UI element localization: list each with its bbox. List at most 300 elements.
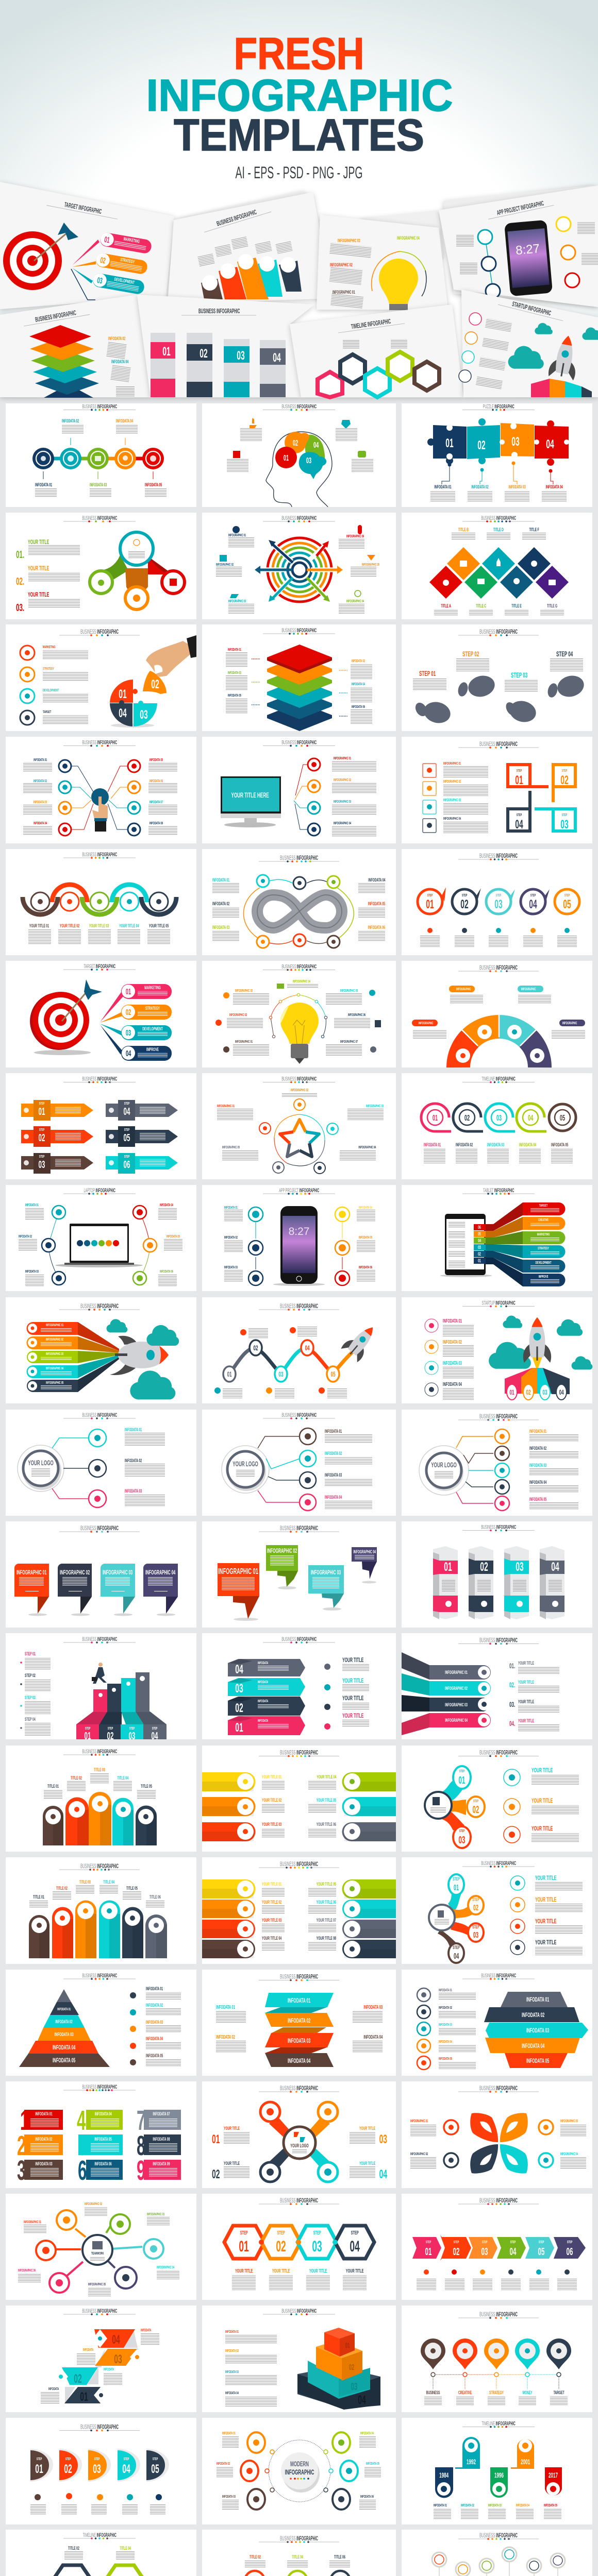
- slide card: columns: BUSINESS INFOGRAPHIC: [198, 308, 240, 315]
- text blocks: INFOGRAPHIC 05: [362, 563, 380, 567]
- stack: [484, 1992, 588, 2068]
- text blocks: INFOGRAPHIC 06: [346, 535, 364, 538]
- boxes: INFODATA 09: [153, 2161, 170, 2166]
- panel: metaball four steps: 03: [473, 1930, 478, 1940]
- heading: BUSINESS INFOGRAPHIC: [80, 1863, 119, 1870]
- heading: BUSINESS INFOGRAPHIC: [281, 515, 317, 521]
- boxes: 6: [78, 2155, 87, 2186]
- heading: [263, 627, 335, 634]
- slide card: columns: 03: [237, 349, 245, 363]
- heading: PUZZLE INFOGRAPHIC: [483, 403, 514, 410]
- panel: eight horizontal bands: [202, 1857, 396, 1964]
- panel: puzzle circle with hand: [6, 624, 196, 731]
- text blocks: INFODATA 04: [516, 2504, 529, 2507]
- puzzle circle: 04: [119, 706, 127, 720]
- heading: BUSINESS INFOGRAPHIC: [80, 2424, 119, 2431]
- text blocks: INFOGRAPHIC 06: [348, 1013, 366, 1017]
- text blocks: [217, 1089, 384, 1161]
- pills: IMPROVE: [146, 1046, 159, 1052]
- text blocks: YOUR TITLE: [224, 2125, 240, 2131]
- panel: metaball four steps: [402, 1857, 592, 1964]
- heading: [462, 1075, 535, 1082]
- hub: MODERN: [290, 2461, 309, 2468]
- subtitle: file formats: AI - EPS - PSD - PNG - JPG: [235, 163, 363, 182]
- text blocks: 04.: [509, 1720, 515, 1728]
- panel: teamwork hub: TEAMWORK: [91, 2252, 104, 2256]
- text blocks: [214, 1326, 347, 1398]
- heading: BUSINESS INFOGRAPHIC: [82, 1748, 118, 1755]
- text blocks: YOUR TITLE: [28, 539, 49, 546]
- heading: BUSINESS INFOGRAPHIC: [82, 2083, 118, 2090]
- panel: metaball four steps: STEP: [453, 1944, 460, 1950]
- text blocks: INFODATA 01: [529, 1428, 546, 1434]
- hub: INFOGRAPHIC: [285, 2469, 314, 2477]
- nodes: [223, 1340, 339, 1382]
- panel: stacked layers: [202, 624, 396, 731]
- heading: [462, 403, 535, 410]
- heading: BUSINESS INFOGRAPHIC: [80, 1525, 119, 1532]
- ribbons: CREATIVE: [538, 1218, 549, 1222]
- heading: LAPTOP INFOGRAPHIC: [84, 1187, 115, 1194]
- panel: metaball four steps: STEP: [453, 1876, 460, 1882]
- chevrons: STEP: [426, 2241, 431, 2244]
- text blocks: YOUR TITLE 07: [317, 1917, 336, 1923]
- heading: BUSINESS INFOGRAPHIC: [281, 2308, 317, 2314]
- text blocks: INFODATA 05: [368, 901, 385, 906]
- blocks: 04: [358, 2393, 366, 2407]
- base columns: 01: [510, 1389, 514, 1397]
- panel: logo with four branches: [202, 1410, 396, 1516]
- parallelograms: 01: [80, 2390, 88, 2404]
- text blocks: TITLE 04: [120, 2545, 131, 2551]
- icons and text: YOUR TITLE: [342, 1695, 364, 1702]
- panel: step squares: 04: [515, 818, 523, 832]
- labels: INFOGRAPHIC: [456, 988, 471, 991]
- heading: BUSINESS INFOGRAPHIC: [481, 515, 517, 521]
- text blocks: INFODATA 03: [222, 2495, 236, 2499]
- panel: concentric target arrows: [202, 513, 396, 619]
- connectors: [256, 1222, 342, 1269]
- text blocks: YOUR TITLE: [518, 1679, 534, 1685]
- timeline: [433, 2375, 559, 2389]
- panel: spiral rings: 02: [464, 1113, 470, 1123]
- text blocks: [212, 2125, 387, 2181]
- logo circle: [222, 1446, 269, 1493]
- text blocks: [226, 648, 372, 724]
- center button and hand: [91, 788, 109, 832]
- rocket: [340, 1320, 381, 1363]
- panel: step squares: STEP: [517, 814, 522, 817]
- puzzle circle: 01: [119, 687, 127, 701]
- hand: [146, 635, 196, 677]
- text blocks: INFODATA 04: [34, 822, 47, 825]
- text blocks: INFOGRAPHIC 01: [235, 1040, 253, 1044]
- hexagons: [28, 2565, 171, 2576]
- circles: [237, 1773, 360, 1840]
- heading: [458, 2197, 539, 2205]
- arrows: INFODATA: [258, 1662, 268, 1665]
- text blocks: INFODATA 02: [62, 418, 79, 423]
- tags: STEP: [39, 1102, 44, 1106]
- text blocks: INFOGRAPHIC 05: [222, 1146, 240, 1149]
- panel: metaball four steps: 02: [473, 1903, 478, 1912]
- heading: [63, 1412, 136, 1418]
- heading: BUSINESS INFOGRAPHIC: [280, 855, 318, 862]
- panel: logo with three branches: YOUR LOGO: [28, 1460, 54, 1467]
- heading: [59, 1525, 140, 1532]
- list: [510, 1876, 525, 1955]
- text blocks: 01.: [509, 1663, 515, 1670]
- heading: [462, 1972, 535, 1979]
- heading: [462, 1187, 535, 1194]
- boxes: 5: [78, 2130, 87, 2161]
- heading: BUSINESS INFOGRAPHIC: [280, 2535, 318, 2543]
- panel: wave with rocket: 04: [305, 1345, 310, 1352]
- stack: INFODATA 03: [526, 2027, 550, 2035]
- boxes: INFODATA 02: [35, 2136, 53, 2142]
- heading: [63, 515, 136, 521]
- panel: speech ribbons row: [6, 1521, 196, 1628]
- text blocks: INFOGRAPHIC 03: [560, 2120, 578, 2123]
- slide card: layers: INFODATA 04: [111, 359, 129, 364]
- panel: zigzag parallelograms: [6, 2306, 196, 2412]
- text blocks: INFODATA 06: [359, 1266, 372, 1269]
- panel: spiral rings: 03: [496, 1113, 502, 1123]
- text blocks: TITLE F: [529, 527, 539, 532]
- chevrons: 02: [453, 2246, 459, 2258]
- text blocks: INFOGRAPHIC 02: [291, 1089, 308, 1092]
- panel: spiral rings: 04: [528, 1113, 534, 1123]
- heading: [462, 1299, 535, 1307]
- text blocks: INFOGRAPHIC 02: [229, 1013, 247, 1017]
- text blocks: [232, 2268, 367, 2290]
- text blocks: INFODATA 01: [34, 758, 47, 762]
- text blocks: YOUR TITLE 01: [29, 923, 49, 928]
- pyramid: INFODATA 03: [55, 2031, 74, 2037]
- chevrons: 05: [538, 2246, 544, 2258]
- panel: hexagon steps: STEP: [277, 2230, 285, 2235]
- text blocks: INFODATA 05: [359, 1236, 372, 1240]
- pyramid: INFODATA 02: [55, 2019, 73, 2024]
- capsules: 02: [64, 2462, 72, 2476]
- nodes: [495, 1429, 509, 1511]
- panel: step rings: STEP: [496, 894, 501, 897]
- capsules: [30, 2449, 169, 2482]
- nodes: [444, 2120, 553, 2167]
- clouds: [489, 1316, 592, 1369]
- text blocks: INFODATA 02: [216, 2034, 235, 2040]
- year blocks: 1996: [494, 2472, 504, 2480]
- panel: step rings: STEP: [564, 894, 570, 897]
- columns: 03: [516, 1560, 524, 1574]
- footprints: [413, 673, 586, 726]
- ribbons: INFOGRAPHIC 03: [103, 1569, 133, 1577]
- ring: [274, 1114, 325, 1166]
- heading: [458, 964, 539, 972]
- panel: puzzle: [402, 403, 592, 507]
- panel: petals: [402, 2081, 592, 2188]
- ribbons: INFOGRAPHIC 01: [218, 1566, 258, 1576]
- pills: 04: [126, 1048, 131, 1058]
- text blocks: YOUR TITLE 01: [262, 1881, 281, 1887]
- text blocks: INFOGRAPHIC 01: [24, 2221, 42, 2224]
- arcs: [23, 885, 176, 914]
- panel: metaball three steps: 03: [459, 1835, 465, 1846]
- text blocks: INFODATA 02: [225, 2349, 239, 2353]
- heading: [63, 1187, 136, 1194]
- list: STEP 03: [25, 1694, 36, 1700]
- heading: BUSINESS INFOGRAPHIC: [479, 1637, 518, 1644]
- columns: 02: [480, 1560, 488, 1574]
- tags: 04: [124, 1106, 130, 1117]
- tags: STEP: [39, 1155, 44, 1159]
- ribbons: 01: [478, 1258, 481, 1263]
- text blocks: TITLE 03: [94, 1767, 105, 1772]
- panel: metaball three steps: 02: [473, 1804, 479, 1816]
- capsules: 05: [151, 2462, 159, 2476]
- text blocks: INFODATA 03: [90, 482, 107, 487]
- slide card: target: [0, 182, 174, 309]
- text blocks: INFODATA 01: [222, 2432, 236, 2435]
- heading: TIMELINE INFOGRAPHIC: [482, 2420, 516, 2427]
- text blocks and icons: [227, 418, 373, 472]
- heading: [259, 2085, 339, 2092]
- text blocks: INFODATA 04: [519, 1142, 537, 1147]
- capsules: STEP: [124, 2458, 129, 2461]
- heading: BUSINESS INFOGRAPHIC: [280, 2085, 318, 2092]
- heading: BUSINESS INFOGRAPHIC: [82, 1636, 118, 1642]
- text blocks: INFODATA: [141, 2329, 151, 2332]
- base columns: 03: [542, 1389, 547, 1397]
- parallelograms: [54, 2329, 144, 2404]
- panel: metaball three steps: YOUR TITLE: [531, 1798, 553, 1805]
- text blocks: INFODATA 01: [325, 1428, 342, 1434]
- text blocks: INFOGRAPHIC 01: [217, 1105, 235, 1108]
- year blocks: 2001: [521, 2459, 530, 2466]
- panel: chain of seven: [202, 2530, 396, 2576]
- title: TEMPLATES: TEMPLATES: [174, 110, 424, 160]
- ribbons: [218, 1545, 377, 1621]
- slide card: light bulb: INFOGRAPHIC 04: [397, 235, 420, 241]
- text blocks: INFODATA 01: [225, 2330, 239, 2334]
- panel: half ring: [402, 961, 592, 1067]
- ribbons: INFOGRAPHIC 04: [145, 1569, 176, 1577]
- heading: BUSINESS INFOGRAPHIC: [281, 739, 317, 745]
- ribbons: 04: [478, 1238, 481, 1243]
- stairs: [76, 1672, 167, 1742]
- panel: metaball three steps: STEP: [459, 1829, 464, 1833]
- slide card: columns: 04: [273, 351, 281, 365]
- text blocks: YOUR TITLE 03: [262, 1821, 281, 1827]
- heading: BUSINESS INFOGRAPHIC: [280, 1973, 318, 1980]
- arrows: 03: [235, 1682, 243, 1696]
- stairs: 02: [107, 1731, 113, 1742]
- heading: [462, 515, 535, 521]
- text blocks: YOUR TITLE: [235, 2268, 253, 2274]
- text blocks: YOUR TITLE 03: [89, 923, 109, 928]
- panel: step arrow tags: [6, 1073, 196, 1179]
- panel: cross with logo: YOUR LOGO: [290, 2143, 309, 2148]
- text blocks: INFODATA 02: [34, 779, 47, 783]
- heading: BUSINESS INFOGRAPHIC: [82, 1075, 118, 1082]
- list: [130, 1986, 181, 2066]
- panel: pins timeline: [402, 2306, 592, 2412]
- ribbons: DEVELOPMENT: [536, 1261, 552, 1265]
- text blocks: [224, 2554, 371, 2576]
- panel: step squares: STEP: [562, 814, 567, 817]
- text blocks: INFODATA: [48, 2387, 59, 2391]
- heading: BUSINESS INFOGRAPHIC: [281, 1636, 317, 1642]
- text blocks: INFODATA 05: [551, 1142, 568, 1147]
- heading: BUSINESS INFOGRAPHIC: [479, 1749, 518, 1756]
- pills: STRATEGY: [145, 1005, 160, 1011]
- heading: [259, 1973, 339, 1980]
- heading: TIMELINE INFOGRAPHIC: [482, 1075, 516, 1082]
- text blocks: [212, 877, 386, 941]
- connectors: [440, 1781, 466, 1831]
- slide card: app phone: [439, 185, 598, 307]
- icons and text: [30, 2493, 165, 2515]
- layers: [267, 645, 332, 731]
- text blocks: [43, 646, 88, 725]
- list: [504, 1769, 520, 1843]
- heading: [59, 1303, 140, 1310]
- text blocks: TITLE 06: [334, 2554, 345, 2560]
- text blocks: INFODATA 01: [25, 1204, 39, 1207]
- panel: diamonds: [402, 513, 592, 619]
- panel: five arched bars: [6, 1745, 196, 1852]
- list: STEP 04: [25, 1716, 36, 1722]
- heading: STARTUP INFOGRAPHIC: [482, 1299, 516, 1306]
- panel: hexagon steps: STEP: [351, 2230, 359, 2235]
- text blocks: TITLE A: [441, 603, 451, 608]
- bars: [29, 1900, 167, 1958]
- nodes: [300, 1428, 316, 1511]
- heading: BUSINESS INFOGRAPHIC: [479, 853, 518, 860]
- slide card: target: 03: [96, 275, 103, 285]
- panel: startup rocket: [402, 1297, 592, 1403]
- text blocks: BUSINESS: [426, 2389, 440, 2395]
- text blocks: TITLE 02: [71, 1775, 82, 1781]
- panel: teamwork hub: [6, 2194, 196, 2300]
- half ring segments: [458, 1027, 540, 1067]
- slide card: light bulb: INFOGRAPHIC 02: [330, 262, 353, 267]
- bands left: [202, 1879, 256, 1958]
- columns: 01: [444, 1560, 452, 1574]
- panel: step rings: 02: [460, 897, 469, 911]
- puzzle pieces: 03: [511, 435, 520, 449]
- panel: startup rocket: INFODATA 03: [443, 1360, 462, 1366]
- panel: logo with three branches: [6, 1410, 196, 1516]
- text blocks: [424, 2389, 568, 2406]
- ribbons: [26, 1322, 78, 1392]
- text blocks: YOUR TITLE 06: [317, 1821, 336, 1827]
- chevrons: STEP: [567, 2241, 572, 2244]
- text blocks: INFOGRAPHIC 01: [228, 534, 246, 537]
- arrows: INFODATA: [258, 1719, 268, 1723]
- text blocks: [224, 1206, 375, 1282]
- panel: startup rocket: INFODATA 01: [443, 1318, 462, 1324]
- text blocks: INFOGRAPHIC 04: [560, 2153, 578, 2156]
- text blocks: [262, 1881, 336, 1951]
- arrows: [228, 1659, 305, 1735]
- boxes: INFODATA 04: [95, 2111, 112, 2116]
- stairs: 01: [85, 1731, 91, 1742]
- panel: metaball three steps: STEP: [473, 1800, 478, 1803]
- heading: [63, 2532, 136, 2538]
- shadows: [28, 1614, 175, 1616]
- capsules: STEP: [94, 2458, 99, 2461]
- slide card: target: MARKETING: [123, 236, 140, 244]
- stack: INFODATA 05: [526, 2058, 550, 2065]
- boxes: 1: [20, 2105, 29, 2136]
- monitor: [221, 776, 281, 827]
- puzzle circle: 02: [151, 677, 159, 691]
- branches: [52, 1438, 88, 1499]
- panel: speech ribbons staggered: [202, 1521, 396, 1628]
- panel: phone app: [202, 1185, 396, 1291]
- ribbons: INFODATA 02: [288, 2018, 311, 2025]
- text blocks: CREATIVE: [458, 2389, 472, 2395]
- text blocks: INFOGRAPHIC 06: [18, 2269, 36, 2273]
- boxes: 9: [137, 2155, 145, 2186]
- parallelograms: 03: [114, 2352, 122, 2366]
- heading: BUSINESS INFOGRAPHIC: [479, 964, 518, 972]
- panel: step squares: 03: [560, 818, 569, 832]
- ribbons: [14, 1564, 178, 1614]
- text blocks: INFODATA 02: [529, 1445, 546, 1451]
- head outline: [266, 432, 332, 507]
- panel: metaball four steps: YOUR TITLE: [535, 1939, 557, 1946]
- text blocks: INFOGRAPHIC 03: [147, 2213, 164, 2216]
- ribbons: INFOGRAPHIC 04: [445, 1717, 468, 1723]
- panel: spiral rings: [402, 1073, 592, 1179]
- heading: [462, 1523, 535, 1530]
- heading: TABLET INFOGRAPHIC: [483, 1187, 514, 1194]
- text blocks: YOUR TITLE 04: [262, 1935, 282, 1941]
- text blocks: TITLE 02: [68, 2545, 79, 2551]
- text blocks: INFODATA 01: [212, 877, 229, 883]
- text blocks: INFOGRAPHIC 03: [228, 600, 246, 603]
- stack: INFODATA 02: [522, 2012, 545, 2019]
- text blocks: INFODATA 04: [352, 683, 365, 686]
- panel: spiral rings: 01: [433, 1113, 438, 1123]
- nodes: [259, 1099, 338, 1174]
- heading: TARGET INFOGRAPHIC: [84, 963, 116, 970]
- connectors: [252, 659, 347, 716]
- boxes: [17, 2105, 181, 2186]
- nodes: [89, 1429, 106, 1507]
- hub: [269, 2440, 330, 2502]
- text blocks: MARKETING: [43, 646, 56, 649]
- list: [417, 1988, 430, 2070]
- text blocks: YOUR TITLE: [224, 2160, 240, 2166]
- text blocks: [125, 1427, 165, 1507]
- text blocks: INFODATA 03: [25, 1270, 39, 1274]
- list: STEP 02: [25, 1672, 36, 1678]
- panel: hexagon grid: [6, 2530, 196, 2576]
- text blocks: INFODATA 03: [212, 924, 229, 930]
- panel: step squares: 02: [560, 773, 569, 787]
- panel: hexagon stack: INFODATA 05: [439, 2057, 452, 2061]
- blocks: [297, 2328, 380, 2410]
- text blocks: YOUR TITLE: [359, 2125, 375, 2131]
- text blocks: INFOGRAPHIC 02: [334, 778, 351, 782]
- tags: 05: [124, 1132, 130, 1144]
- panel: step rings: 03: [494, 897, 503, 911]
- panel: hexagon steps: 02: [276, 2238, 286, 2255]
- text blocks: INFODATA 03: [488, 2504, 502, 2507]
